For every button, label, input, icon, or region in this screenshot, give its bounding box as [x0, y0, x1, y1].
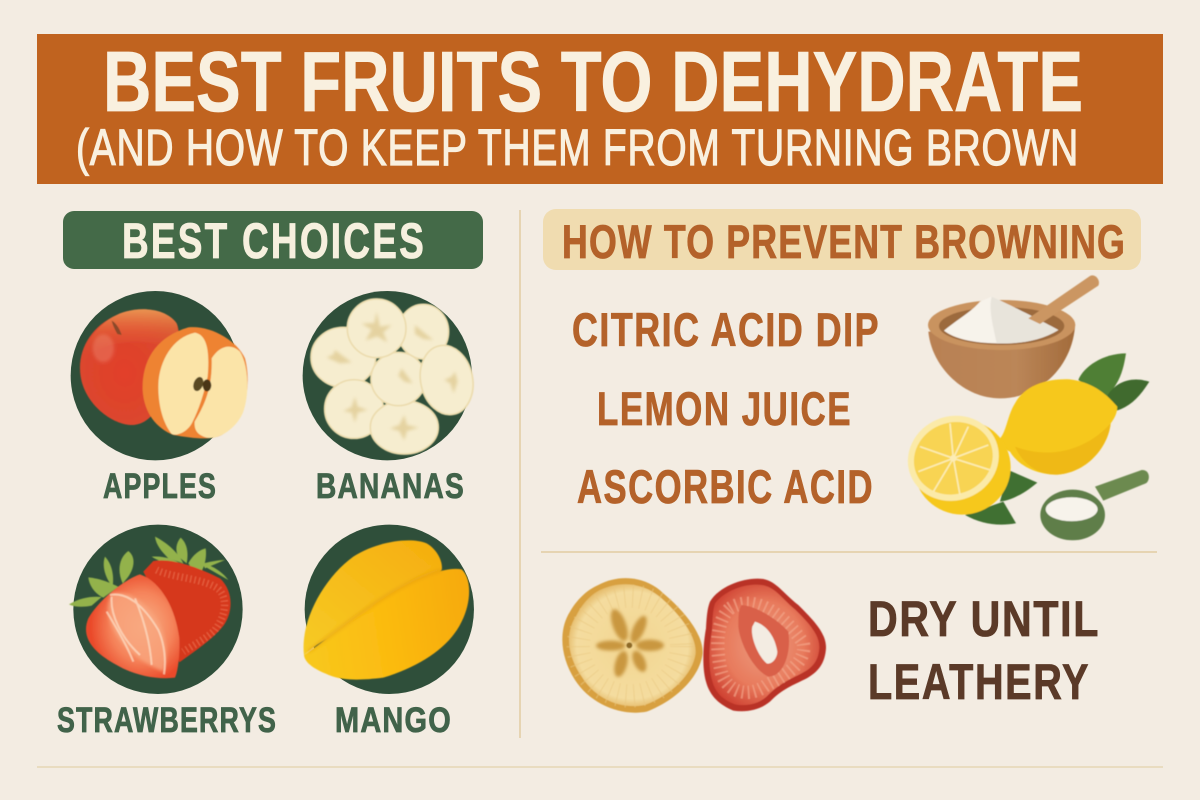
title banner: [37, 34, 1163, 184]
text: ascorbic acid: ASCORBIC ACID: [577, 460, 874, 513]
panel: how to prevent browning: [543, 209, 1149, 540]
panel: dry until leathery: [562, 578, 1100, 713]
heading: best choices: BEST CHOICES: [122, 213, 426, 269]
icon: strawberrys: [69, 525, 243, 694]
icon: measuring spoon: [1040, 470, 1149, 540]
text: citric acid dip: CITRIC ACID DIP: [572, 303, 880, 356]
label: mango: MANGO: [335, 701, 452, 740]
text: dry until leathery: DRY UNTIL: [868, 591, 1100, 647]
text: dry until leathery: LEATHERY: [868, 654, 1090, 710]
icon: mango: [304, 525, 474, 694]
icon: lemon half: [895, 402, 1037, 525]
icon: dried apple slice: [562, 578, 703, 713]
label: strawberrys: STRAWBERRYS: [57, 701, 277, 740]
label: apples: APPLES: [103, 467, 217, 506]
text: dry until leathery: [868, 591, 1100, 710]
icon: dried strawberry slice: [703, 579, 826, 711]
icon: bowl of citric acid: [928, 275, 1099, 398]
panel: best choices: [57, 211, 483, 740]
icon: whole lemon with leaves: [998, 353, 1149, 475]
icon: apples: [71, 291, 248, 460]
text: lemon juice: LEMON JUICE: [597, 382, 852, 435]
label: bananas: BANANAS: [316, 467, 465, 506]
icon: bananas: [303, 291, 479, 460]
